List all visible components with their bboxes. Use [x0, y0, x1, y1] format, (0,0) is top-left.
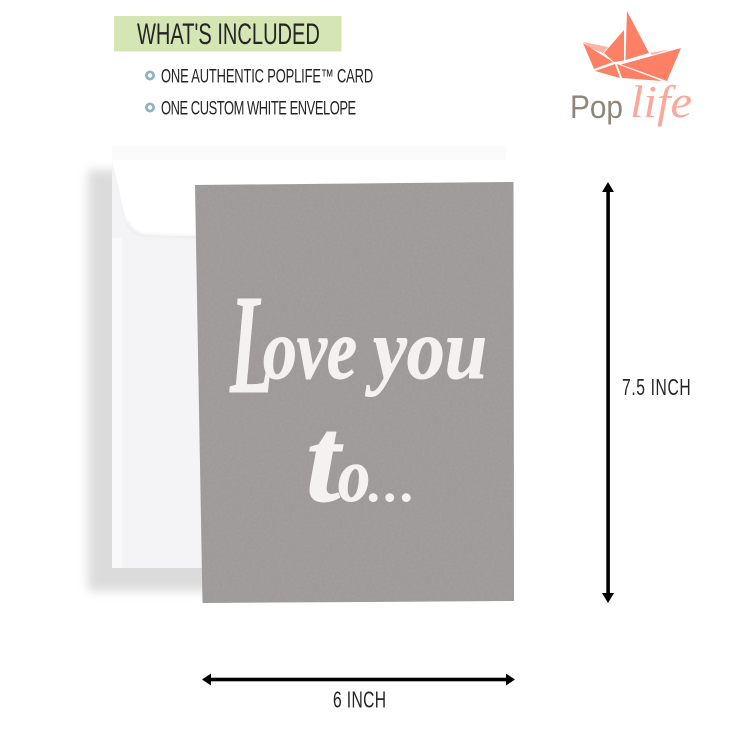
arrow: height dimension: [602, 182, 614, 603]
card text: to...: o: [338, 434, 370, 518]
envelope shadow: [88, 170, 228, 591]
card text: to...: [306, 393, 418, 528]
icon: origami boat: [583, 11, 681, 81]
label: 7.5 inch: 7.5 INCH: [622, 375, 691, 401]
envelope flap: [112, 160, 506, 236]
envelope: [112, 146, 506, 568]
greeting card: [195, 182, 514, 603]
label: 6 inch: 6 INCH: [333, 688, 386, 713]
logo word: pop: Pop: [570, 89, 623, 125]
icon: bullet ring two: [146, 104, 154, 111]
logo word: life: life: [630, 76, 692, 127]
card text: to...: t: [306, 393, 343, 528]
list: included items: [146, 66, 373, 119]
card text: love you: you: [365, 301, 487, 397]
card text: love you: L: [229, 265, 274, 423]
item: poplife card: ONE AUTHENTIC POPLIFE™ CARD: [161, 66, 373, 87]
logo: poplife: [570, 11, 692, 127]
arrow: width dimension: [202, 674, 515, 686]
card text: love you: [229, 265, 487, 423]
card text: to...: ...: [369, 459, 418, 512]
icon: bullet ring one: [146, 72, 154, 79]
item: white envelope: ONE CUSTOM WHITE ENVELOPE: [161, 98, 356, 119]
heading: what's included: WHAT'S INCLUDED: [137, 18, 320, 51]
card text: love you: ove: [263, 301, 357, 397]
